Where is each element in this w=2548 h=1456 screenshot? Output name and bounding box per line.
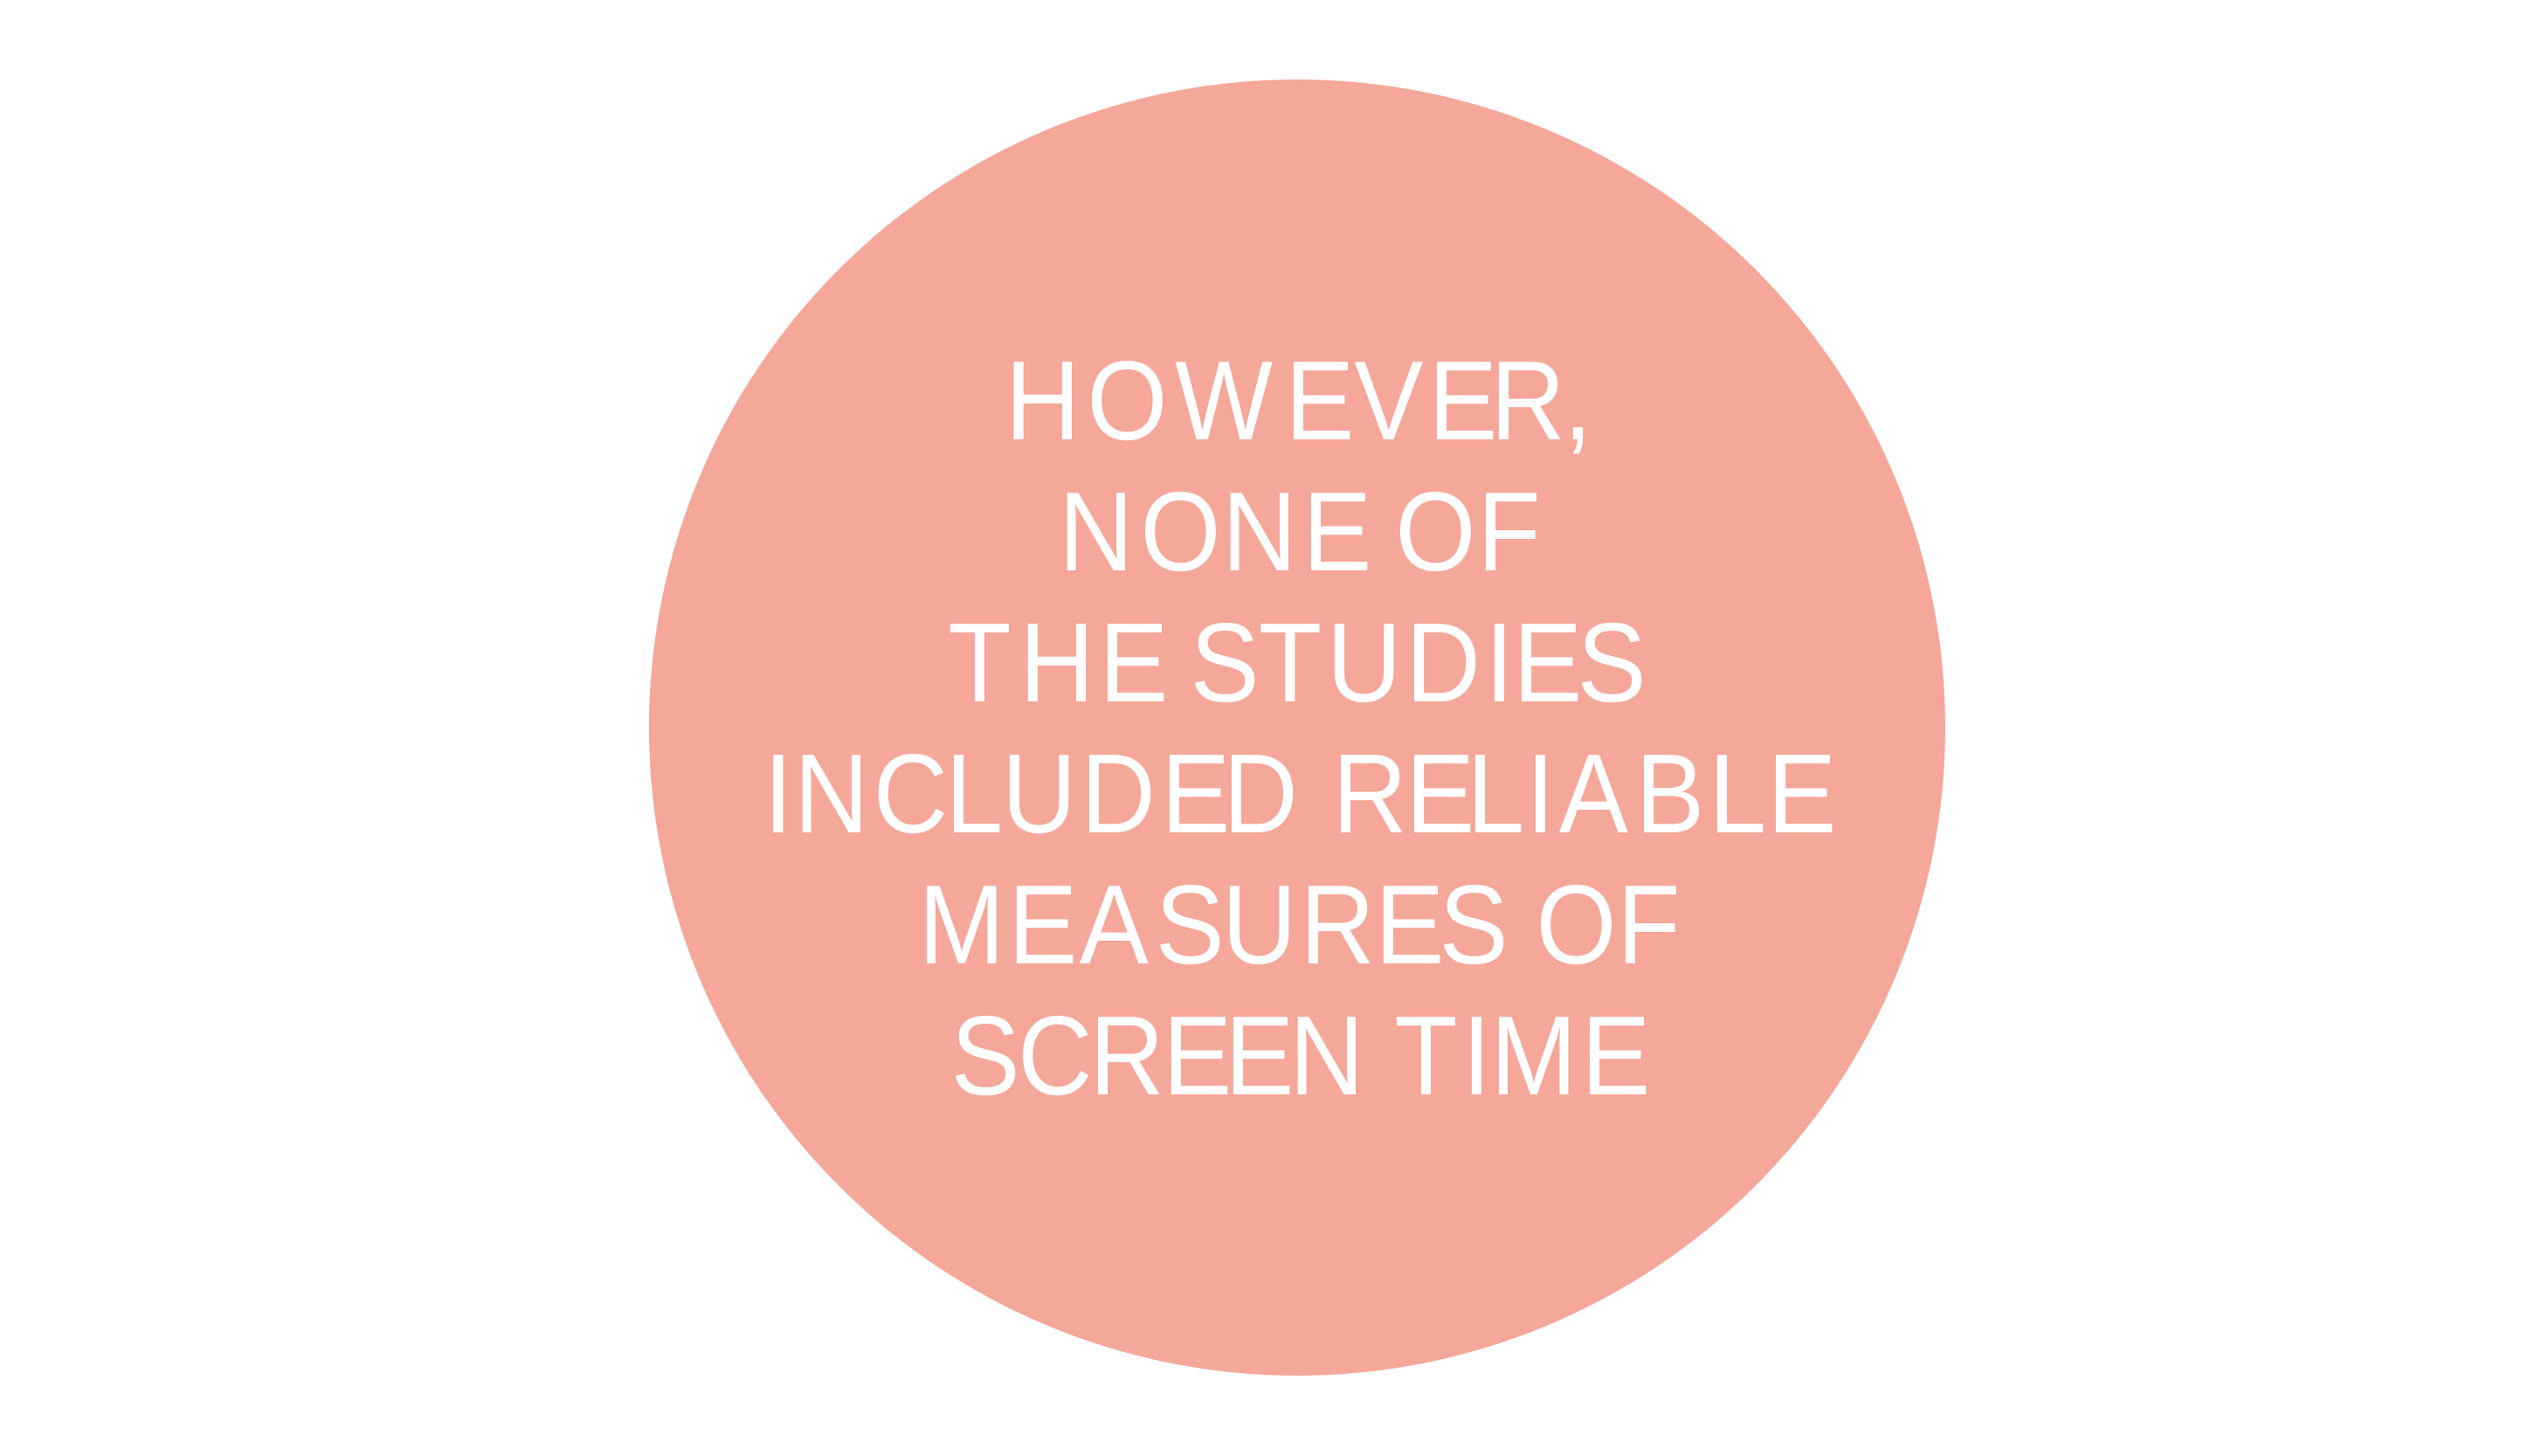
statement text [763,338,1836,1119]
text line: SCREEN TIME: SCREEN TIME [951,993,1650,1119]
text line: THE STUDIES: THE STUDIES [948,600,1647,726]
text line: MEASURES OF: MEASURES OF [918,862,1681,988]
text line: HOWEVER,: HOWEVER, [1005,338,1592,464]
panel: salmon circle [649,79,1945,1376]
text line: NONE OF: NONE OF [1059,469,1541,595]
text line: INCLUDED RELIABLE: INCLUDED RELIABLE [763,731,1836,857]
